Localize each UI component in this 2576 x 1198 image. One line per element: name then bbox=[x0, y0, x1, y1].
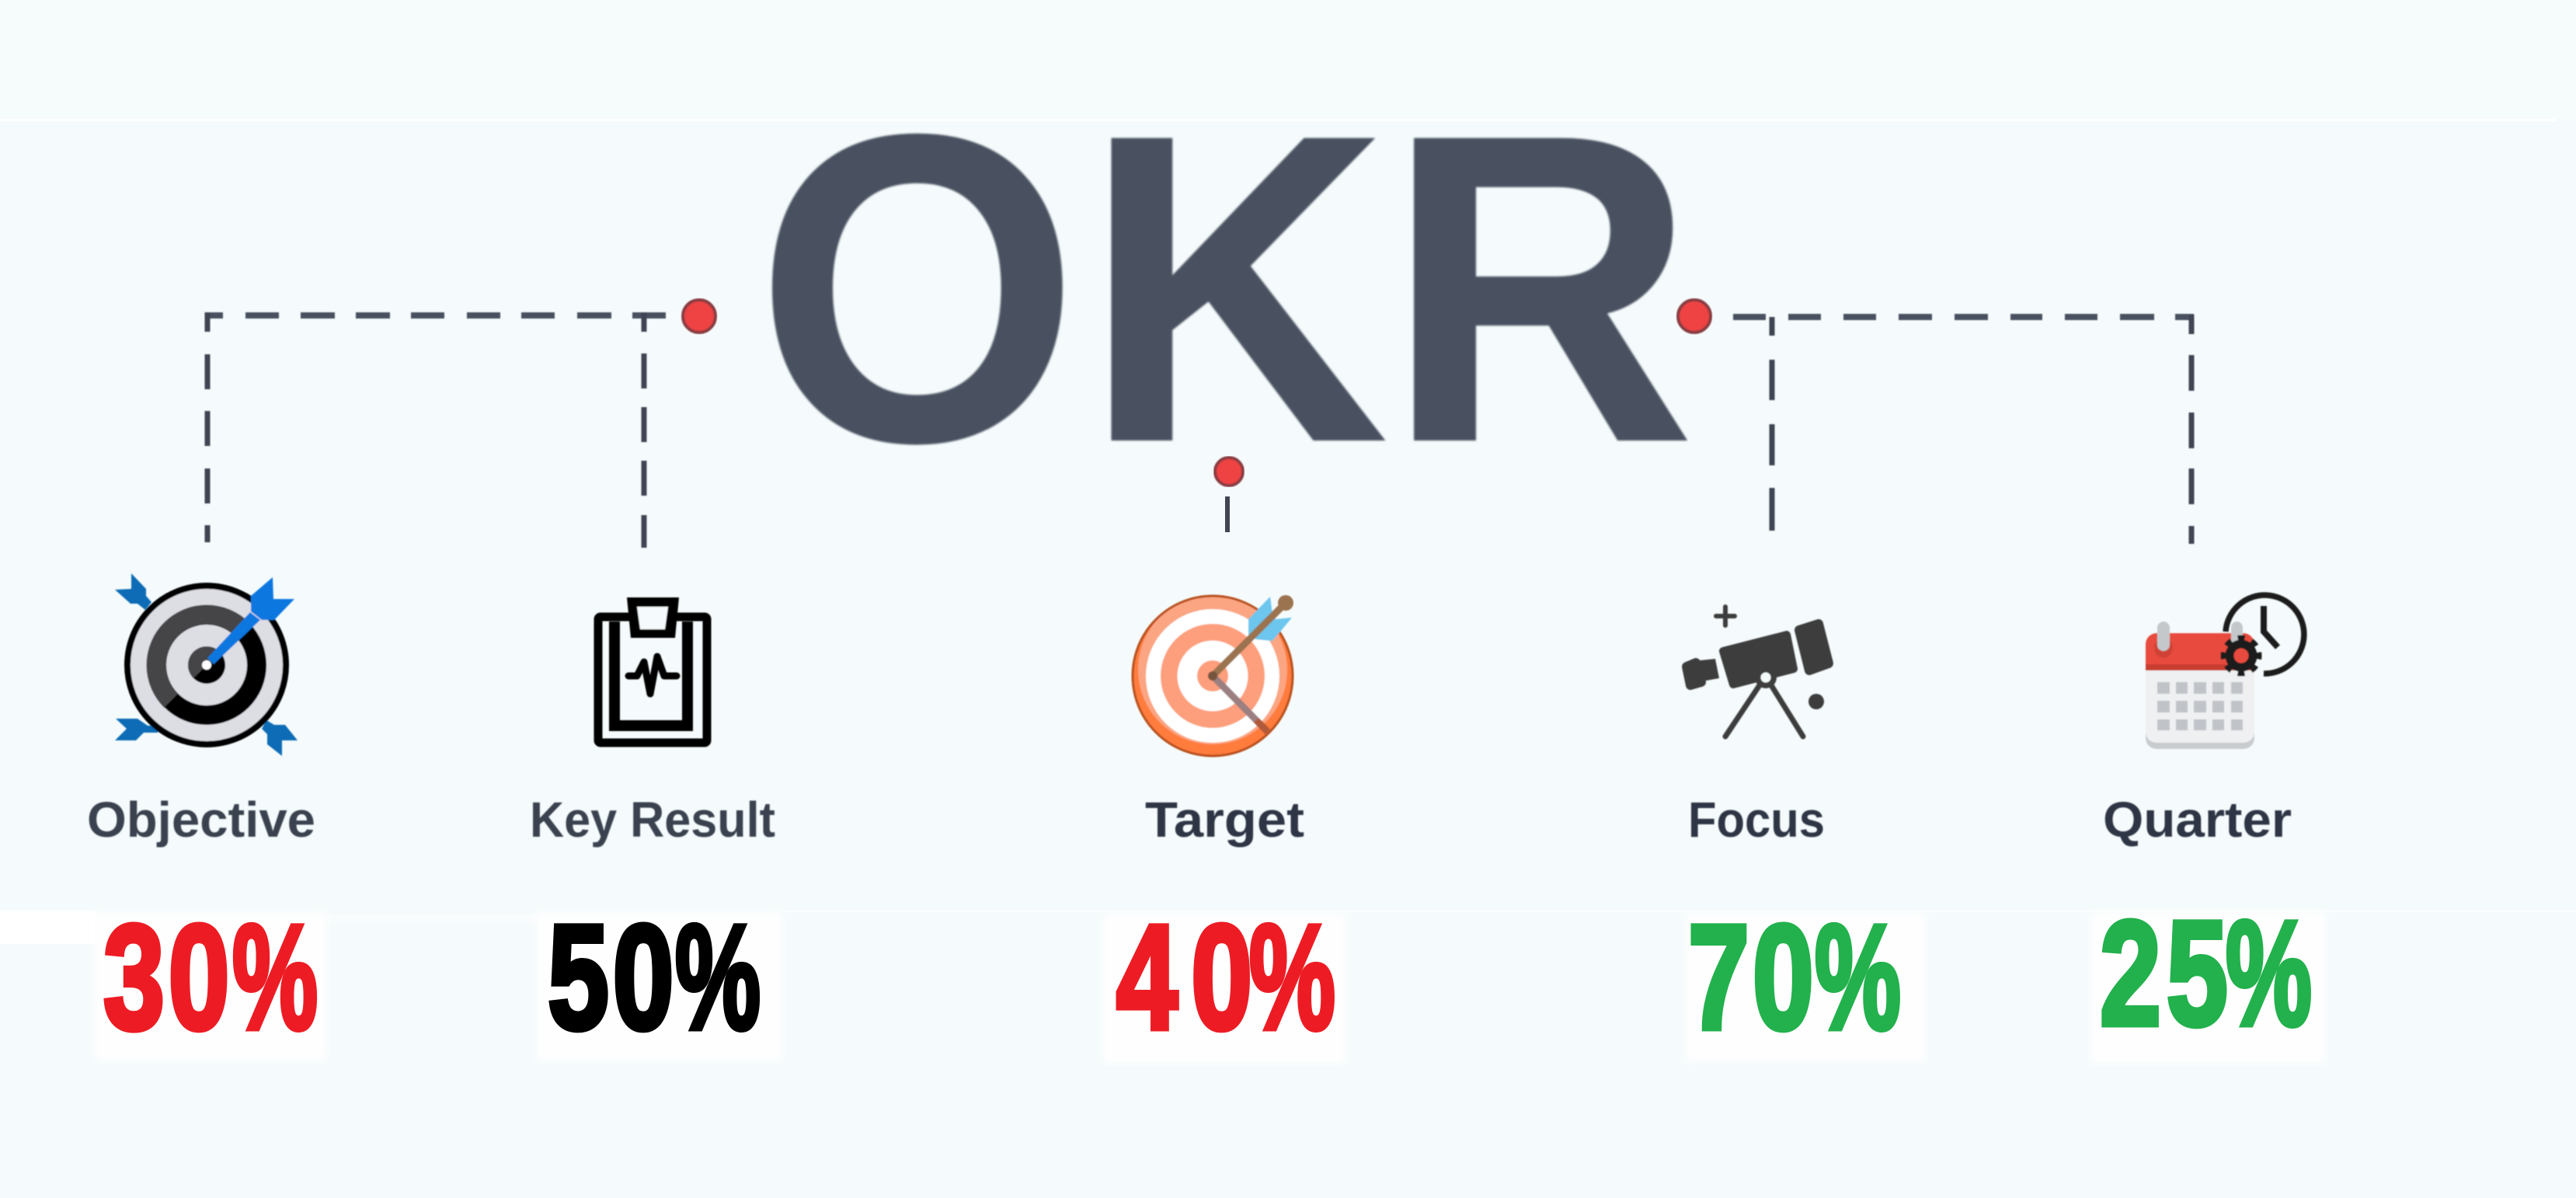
value: 70%: % bbox=[1815, 894, 1901, 1061]
label: Quarter: Quarter bbox=[2103, 792, 2292, 848]
title: OKR bbox=[755, 42, 1697, 534]
value: 25% bbox=[2100, 890, 2312, 1057]
value: 30%: % bbox=[232, 895, 318, 1061]
value: 40%: 40 bbox=[1116, 893, 1252, 1060]
icon: clipboard bbox=[598, 597, 707, 743]
value: 25%: % bbox=[2226, 890, 2312, 1057]
connector: left dashed lines bbox=[205, 312, 666, 548]
connector: right dashed lines bbox=[1733, 315, 2194, 544]
value: 70%: 70 bbox=[1688, 893, 1814, 1060]
value: 40%: % bbox=[1249, 894, 1335, 1061]
label: Focus: Focus bbox=[1688, 792, 1825, 848]
title: OKR: R bbox=[1385, 43, 1697, 534]
icon: telescope bbox=[1687, 607, 1829, 737]
label: Objective: Objective bbox=[87, 792, 315, 848]
value: 50%: 50 bbox=[548, 893, 674, 1060]
value: 30% bbox=[103, 893, 318, 1061]
value: 30%: 30 bbox=[103, 893, 230, 1060]
label: Target: Target bbox=[1145, 792, 1304, 848]
dot: centre bbox=[1215, 458, 1243, 486]
value: 40% bbox=[1116, 893, 1335, 1061]
title: OKR: O bbox=[755, 42, 1080, 534]
title: OKR: K bbox=[1083, 43, 1389, 534]
dot: left bbox=[683, 300, 715, 333]
value: 25%: 25 bbox=[2100, 890, 2228, 1057]
value: 70% bbox=[1688, 893, 1901, 1061]
dot: right bbox=[1678, 300, 1711, 333]
icon: objective target with arrows bbox=[115, 573, 298, 756]
value: 50% bbox=[548, 893, 761, 1061]
icon: orange target bbox=[1133, 595, 1293, 756]
value: 50%: % bbox=[675, 895, 761, 1061]
connector: centre line bbox=[1225, 496, 1230, 532]
icon: calendar with clock and gear bbox=[2146, 595, 2304, 749]
label: Key Result: Key Result bbox=[530, 792, 775, 848]
